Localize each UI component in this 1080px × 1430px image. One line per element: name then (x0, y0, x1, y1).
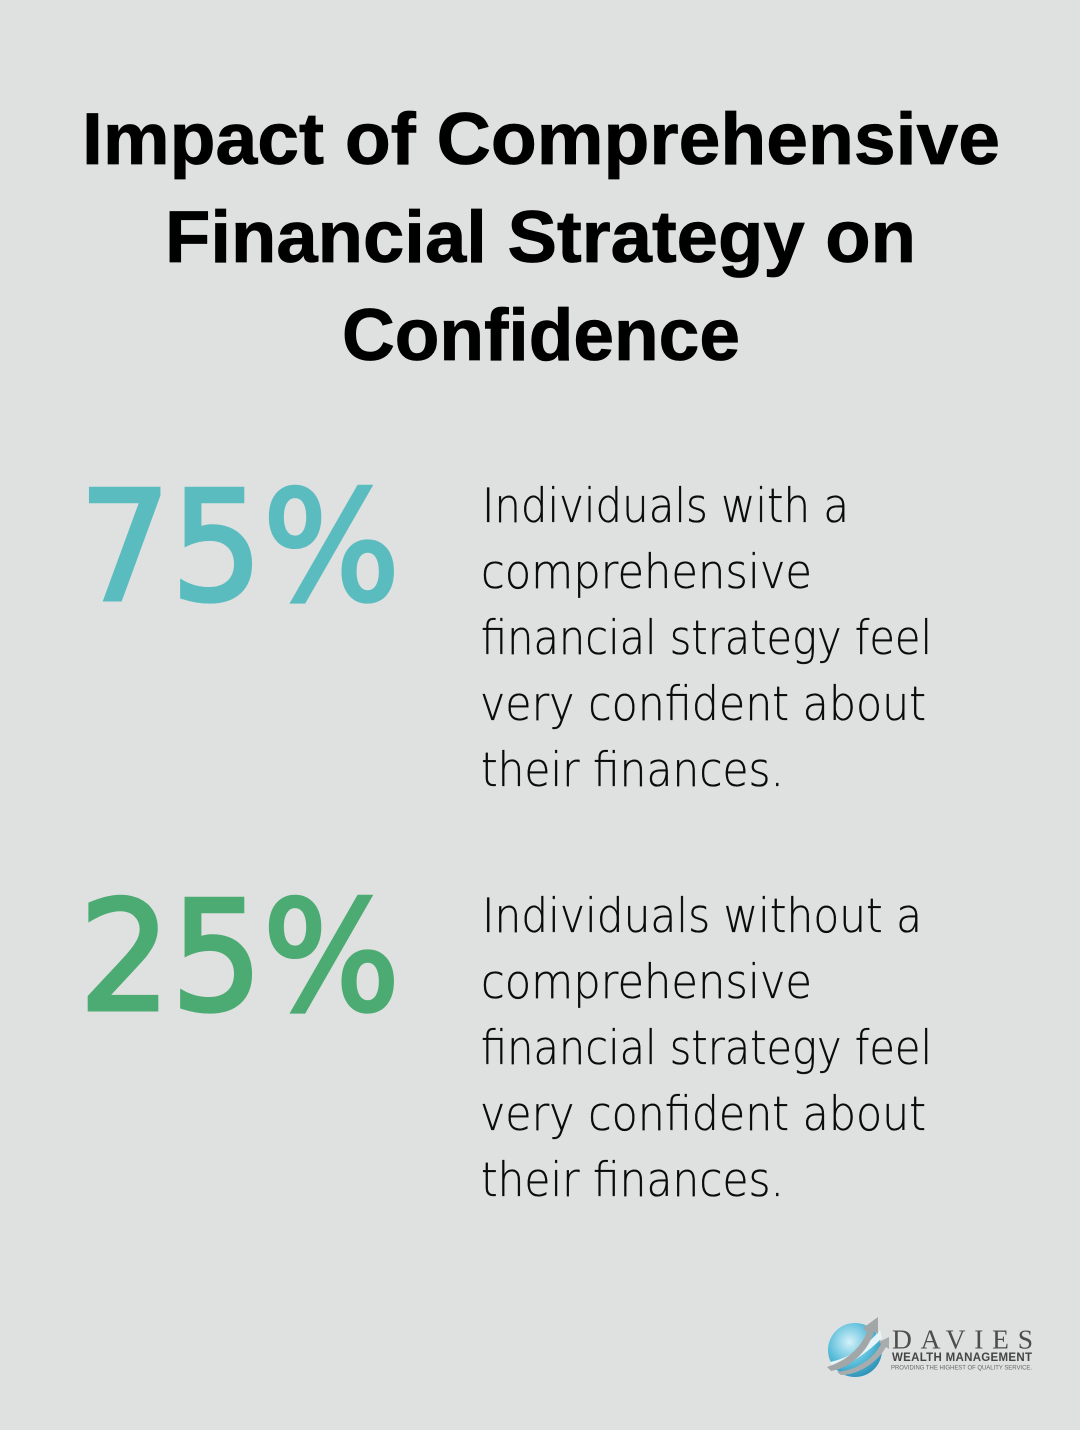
text block: without a strategy: their finances. (481, 1153, 784, 1208)
logo tagline: PROVIDING THE HIGHEST OF QUALITY SERVICE. (891, 1364, 1032, 1372)
title: Financial Strategy on (165, 197, 916, 278)
text block: with a strategy: their finances. (481, 743, 784, 798)
icon: globe with arrows (827, 1317, 889, 1377)
text block: with a strategy: comprehensive (481, 545, 812, 600)
text block: without a strategy: Individuals without a (482, 889, 922, 944)
stat: 25%: 25% (79, 868, 400, 1046)
stat: 75%: 75% (79, 458, 400, 636)
text block: without a strategy: very confident about (480, 1087, 926, 1142)
text block: with a strategy (480, 479, 932, 798)
text block: without a strategy (480, 889, 932, 1208)
text block: without a strategy: comprehensive (481, 955, 812, 1010)
text block: with a strategy: Individuals with a (482, 479, 849, 534)
logo subtitle: WEALTH MANAGEMENT (892, 1352, 1032, 1364)
text block: with a strategy: financial strategy feel (481, 611, 932, 666)
logo wordmark: DAVIES (892, 1324, 1033, 1354)
title (82, 99, 1000, 376)
logo: Davies Wealth Management (827, 1317, 1033, 1377)
text block: with a strategy: very confident about (480, 677, 926, 732)
title: Confidence (342, 295, 740, 376)
text block: without a strategy: financial strategy feel (481, 1021, 932, 1076)
title: Impact of Comprehensive (82, 99, 1000, 180)
